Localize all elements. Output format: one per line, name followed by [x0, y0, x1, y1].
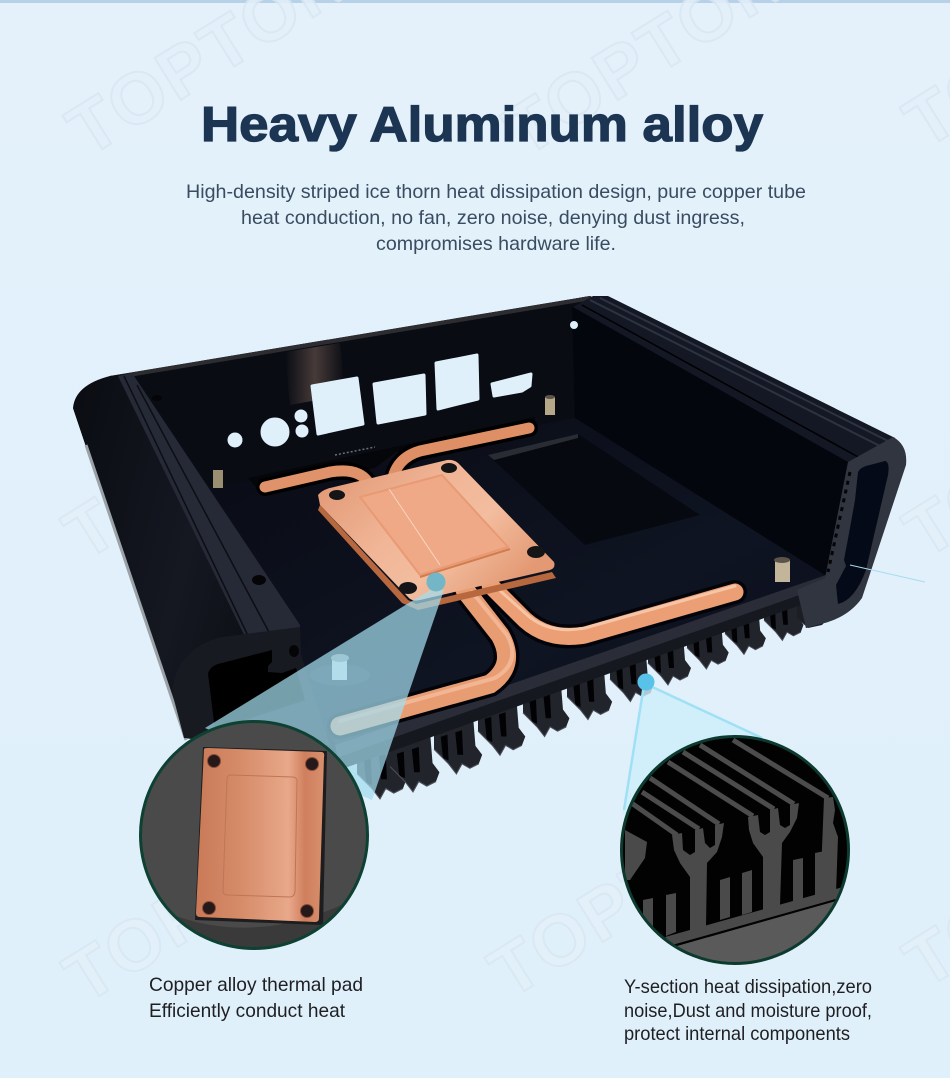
- right end opening: [836, 461, 889, 604]
- caption: fins: protect internal components: [624, 1023, 850, 1045]
- right end face: [797, 437, 906, 628]
- caption: copper pad: Copper alloy thermal pad: [149, 974, 363, 996]
- copper top plate: [360, 475, 508, 575]
- right inner wall: [572, 306, 848, 578]
- callout dot: copper pad: [426, 572, 446, 592]
- detail circle: Y-section fins: [621, 736, 850, 980]
- left rail: [118, 373, 300, 647]
- description text: heat conduction, no fan, zero noise, denying dust ingress,: [241, 207, 745, 229]
- left end face: [172, 627, 330, 745]
- callout beam: copper pad: [205, 590, 444, 800]
- base plate: [677, 902, 834, 962]
- description text: compromises hardware life.: [376, 233, 616, 255]
- fin base: [665, 885, 850, 945]
- fin root band: [338, 583, 826, 769]
- pad recessed panel: [223, 775, 297, 897]
- back wall copper reflection: [285, 343, 345, 405]
- left end opening: [208, 650, 305, 730]
- watermarks: TOPTON: [476, 779, 786, 1014]
- floor: [200, 418, 828, 748]
- title: Heavy Aluminum alloy: [201, 98, 763, 152]
- watermarks: TOPTON: [51, 784, 361, 1019]
- heat pipes: [265, 428, 735, 726]
- caption: fins: noise,Dust and moisture proof,: [624, 1000, 872, 1022]
- right rail: [573, 296, 895, 462]
- description text: High-density striped ice thorn heat dissipation design, pure copper tube: [186, 181, 806, 203]
- floor front edge: [335, 575, 828, 757]
- fin ribs: [630, 740, 828, 835]
- copper plate screws: [329, 463, 545, 594]
- left outer wall: [73, 373, 300, 738]
- fin pins: [720, 877, 730, 920]
- floor recess panel: [488, 434, 700, 545]
- product photo: aluminum chassis: [73, 296, 906, 799]
- heat sink fins: [357, 590, 831, 799]
- detail circle: copper thermal pad: [140, 721, 370, 950]
- caption: fins: [624, 976, 872, 1045]
- I/O port cut-outs: [229, 322, 576, 446]
- callout beam: fins: [622, 685, 775, 815]
- top lip: [110, 296, 592, 376]
- copper pad: [196, 748, 324, 922]
- small solder dots: [335, 447, 375, 455]
- standoffs: [213, 395, 790, 686]
- Y fins: [625, 797, 850, 945]
- watermarks: TOPTON: [51, 341, 361, 576]
- pad screws: [202, 754, 318, 918]
- caption: copper pad: [149, 974, 363, 1022]
- rear shelf: [248, 417, 535, 490]
- caption: copper pad: Efficiently conduct heat: [149, 1000, 346, 1022]
- left edge highlight: [86, 445, 186, 740]
- chassis base silhouette: [73, 296, 905, 757]
- callout dot: fins: [638, 674, 654, 690]
- caption: fins: Y-section heat dissipation,zero: [624, 976, 872, 998]
- top strip: [0, 0, 950, 3]
- thin pointer line: [850, 565, 925, 582]
- description text: [186, 181, 806, 255]
- back wall: [120, 296, 600, 500]
- copper base plate: [318, 460, 554, 601]
